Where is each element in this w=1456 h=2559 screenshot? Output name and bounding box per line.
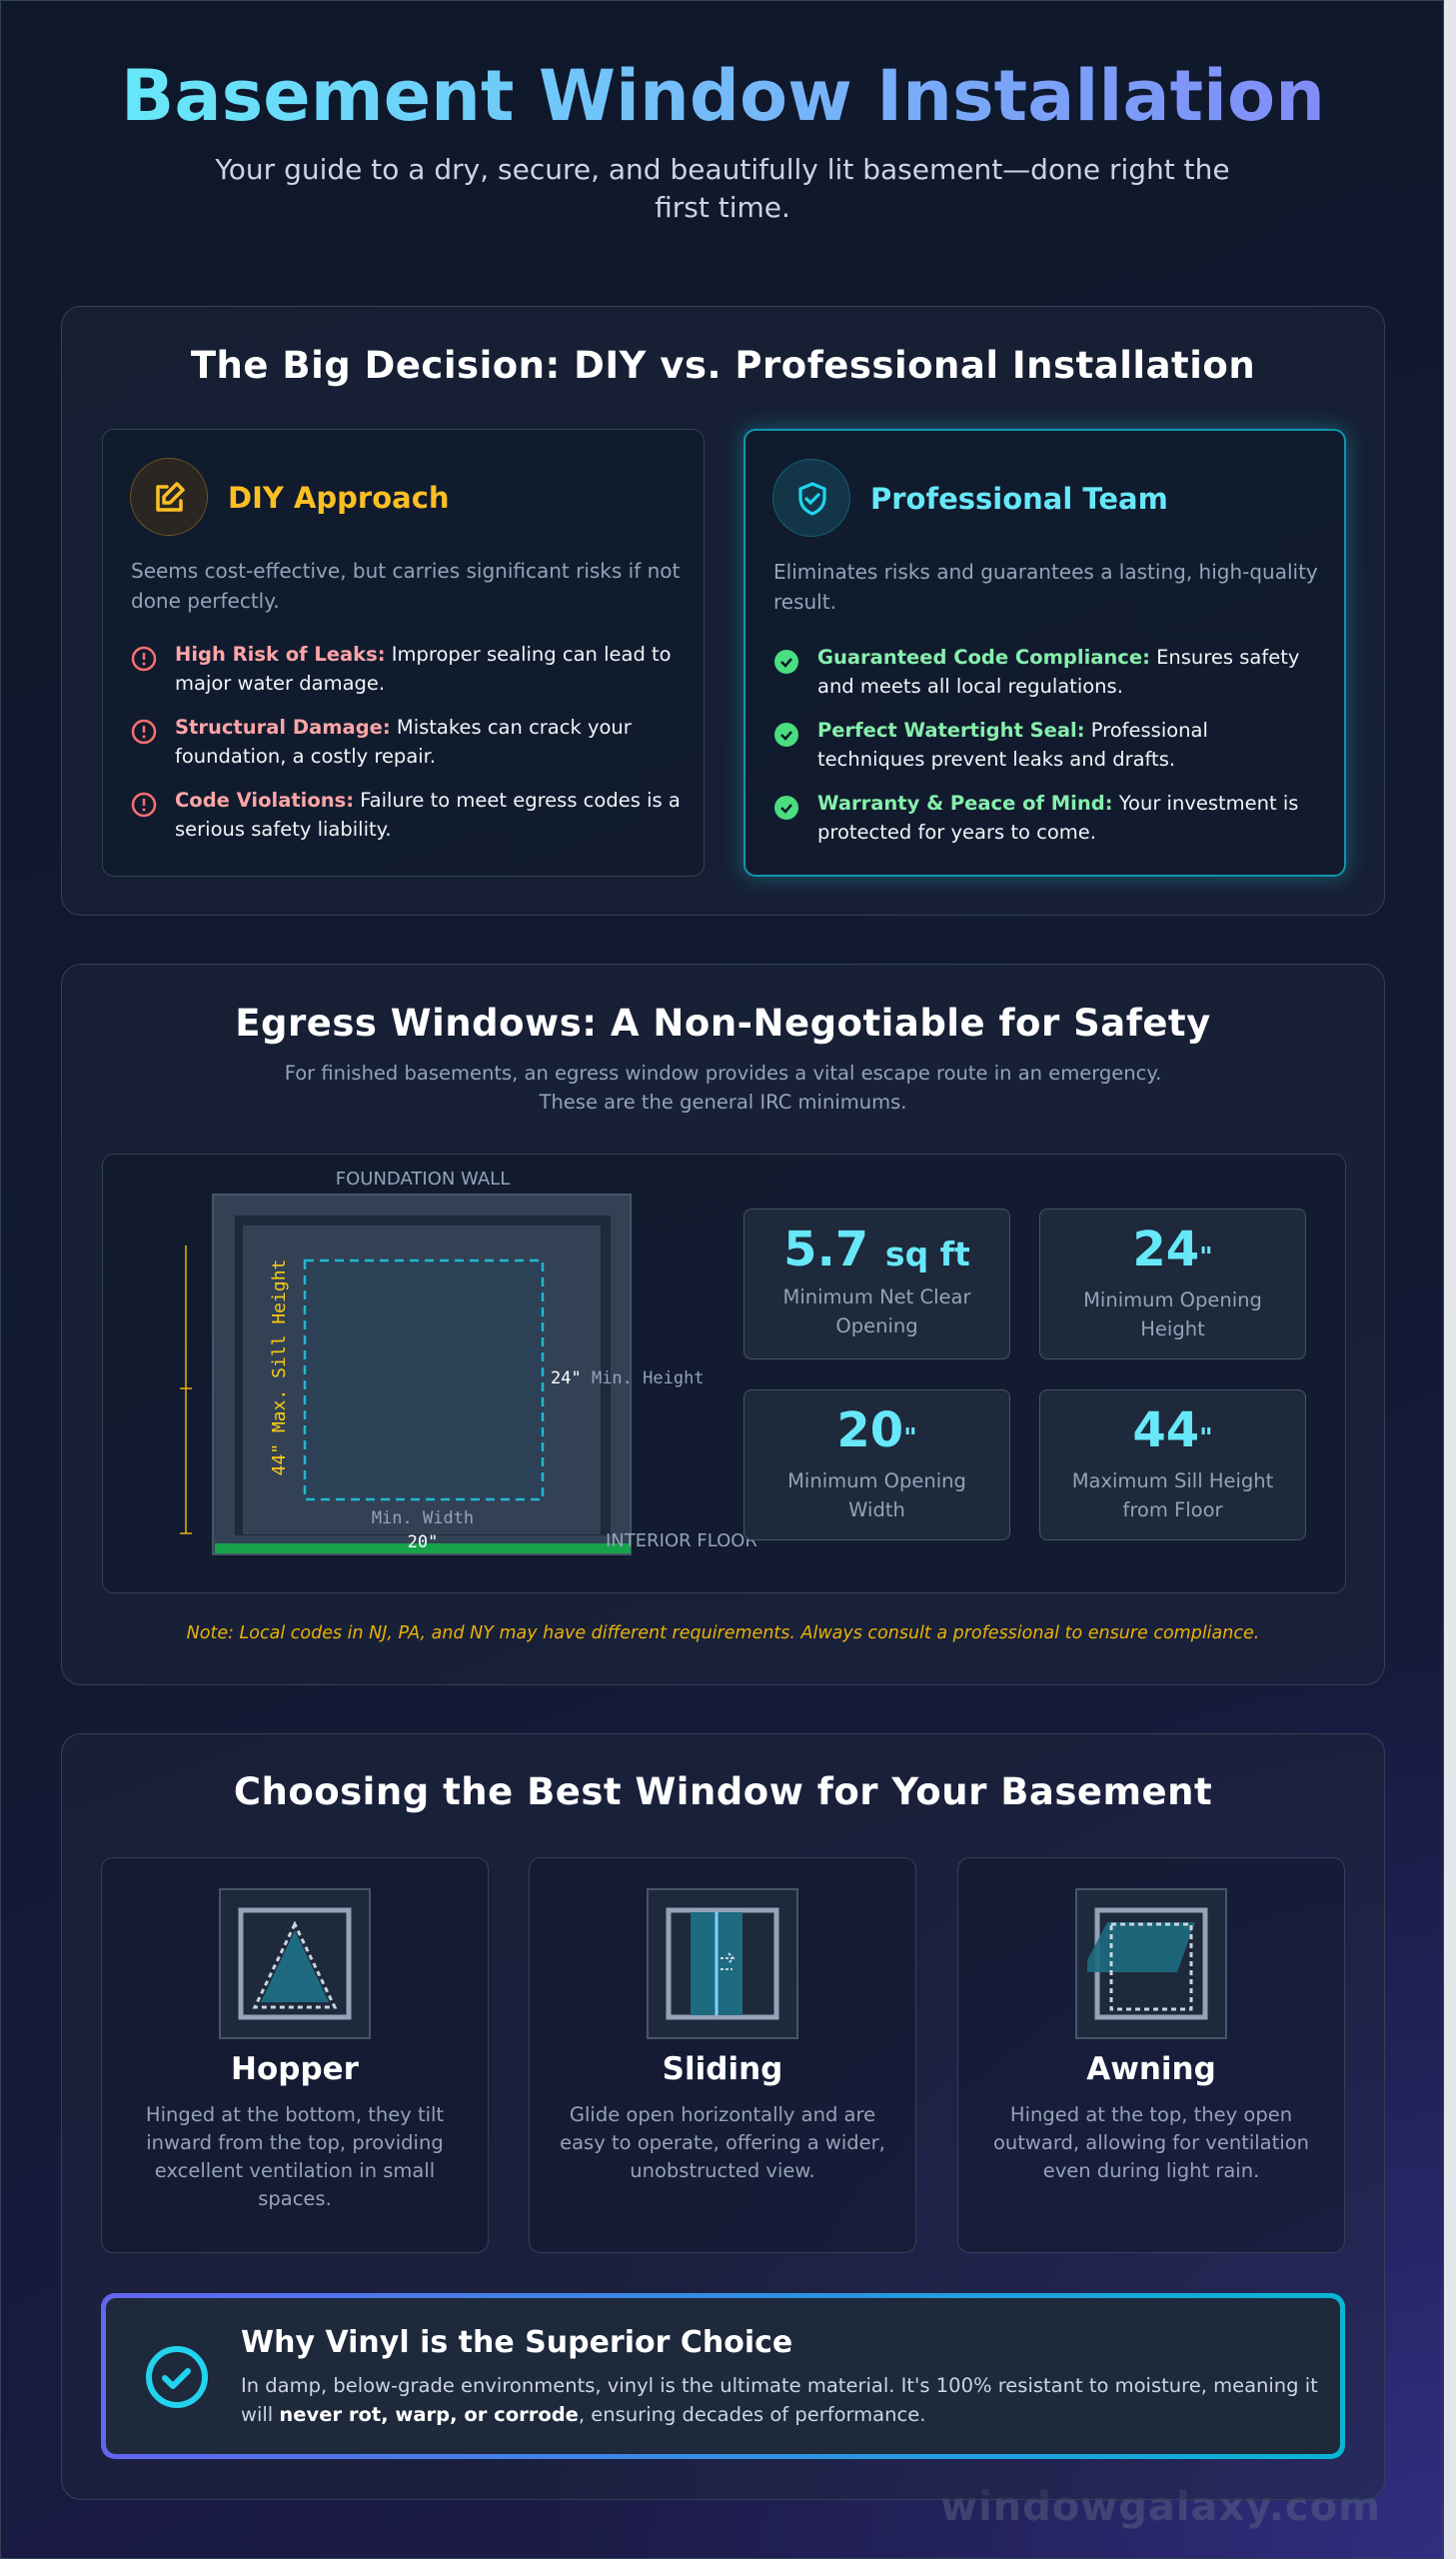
card: hopper	[101, 1857, 489, 2253]
egress diagram: FOUNDATION WALL	[336, 1169, 510, 1190]
egress diagram	[180, 1169, 757, 1555]
stat: height	[1039, 1209, 1306, 1359]
card: sliding: Glide open horizontally and are easy to operate, offering a wider, unobstructed view.	[560, 2103, 885, 2182]
egress diagram: 20"	[408, 1532, 438, 1552]
card: awning	[957, 1857, 1345, 2253]
pro desc: Eliminates risks and guarantees a lasting, high-quality result.	[773, 560, 1318, 614]
stat: height: Height	[1140, 1317, 1205, 1340]
stat: width: Minimum Opening	[787, 1469, 966, 1492]
stat: width	[743, 1389, 1010, 1540]
icon: check circle	[146, 2346, 208, 2408]
card: hopper: Hinged at the bottom, they tilt inward from the top, providing excellent ventilation in small spaces.	[146, 2103, 444, 2210]
egress diagram: 44" Max. Sill Height	[269, 1260, 290, 1475]
DIY list: Structural Damage: Mistakes can crack your foundation, a costly repair.	[175, 716, 632, 768]
icon: sliding	[647, 1888, 798, 2039]
DIY list: High Risk of Leaks: Improper sealing can lead to major water damage.	[175, 643, 672, 695]
card: sliding	[529, 1857, 916, 2253]
pro list: Perfect Watertight Seal: Professional techniques prevent leaks and drafts.	[817, 719, 1208, 771]
icon: hopper	[219, 1888, 371, 2039]
callout: vinyl	[101, 2293, 1345, 2459]
card: DIY	[102, 429, 705, 877]
note: Note: Local codes in NJ, PA, and NY may have different requirements. Always consult a professional to ensure compliance.	[187, 1623, 1259, 1643]
card: hopper: Hopper	[231, 2051, 359, 2087]
heading: The Big Decision: DIY vs. Professional Installation	[191, 344, 1255, 387]
title: Basement Window Installation	[121, 55, 1325, 137]
stat: area: 5.7 sq ft	[783, 1222, 970, 1278]
egress diagram: 24" Min. Height	[551, 1368, 705, 1388]
subheading: For finished basements, an egress window provides a vital escape route in an emergency.	[285, 1062, 1161, 1085]
pro list: Guaranteed Code Compliance: Ensures safety and meets all local regulations.	[817, 646, 1299, 698]
diagram box	[102, 1154, 1346, 1593]
vinyl title: Why Vinyl is the Superior Choice	[241, 2325, 792, 2360]
watermark: windowgalaxy.com	[940, 2484, 1381, 2530]
stat: area: Opening	[835, 1314, 918, 1337]
stat: height: 24"	[1132, 1222, 1213, 1278]
icon: edit	[130, 458, 208, 536]
card: awning: Hinged at the top, they open outward, allowing for ventilation even during light rain.	[993, 2103, 1309, 2182]
vinyl body: In damp, below-grade environments, vinyl is the ultimate material. It's 100% resistant to moisture, meaning it will never rot, warp, or corrode, ensuring decades of performance.	[241, 2374, 1318, 2426]
card: professional	[743, 429, 1346, 877]
stat: width: 20"	[836, 1402, 917, 1458]
pro title: Professional Team	[870, 482, 1168, 516]
icon: shield	[772, 459, 850, 537]
stat: area: Minimum Net Clear	[783, 1285, 971, 1308]
pro list: Warranty & Peace of Mind: Your investment is protected for years to come.	[817, 792, 1298, 844]
panel: DIY vs pro	[61, 306, 1385, 916]
stat: sill: Maximum Sill Height	[1072, 1469, 1273, 1492]
heading: Choosing the Best Window for Your Basement	[234, 1770, 1212, 1813]
subheading: These are the general IRC minimums.	[540, 1091, 906, 1114]
icon: awning	[1075, 1888, 1227, 2039]
DIY title: DIY Approach	[228, 481, 450, 515]
DIY desc: Seems cost-effective, but carries significant risks if not done perfectly.	[131, 559, 680, 613]
stat: sill	[1039, 1389, 1306, 1540]
stat: area	[743, 1209, 1010, 1359]
panel: window types	[61, 1733, 1385, 2500]
card: sliding: Sliding	[663, 2051, 782, 2087]
stat: width: Width	[848, 1498, 905, 1521]
egress diagram: Min. Width	[372, 1508, 474, 1528]
pro list	[774, 646, 1299, 844]
subtitle: Your guide to a dry, secure, and beautifully lit basement—done right the first time.	[215, 153, 1230, 224]
stat: sill: from Floor	[1122, 1498, 1223, 1521]
stat: height: Minimum Opening	[1083, 1288, 1262, 1311]
panel: egress	[61, 964, 1385, 1685]
egress diagram: INTERIOR FLOOR	[606, 1530, 757, 1551]
heading: Egress Windows: A Non-Negotiable for Safety	[235, 1002, 1211, 1045]
DIY list	[132, 643, 681, 841]
subheading	[285, 1062, 1161, 1114]
stat: sill: 44"	[1132, 1402, 1213, 1458]
DIY list: Code Violations: Failure to meet egress codes is a serious safety liability.	[175, 789, 681, 841]
card: awning: Awning	[1086, 2051, 1216, 2087]
